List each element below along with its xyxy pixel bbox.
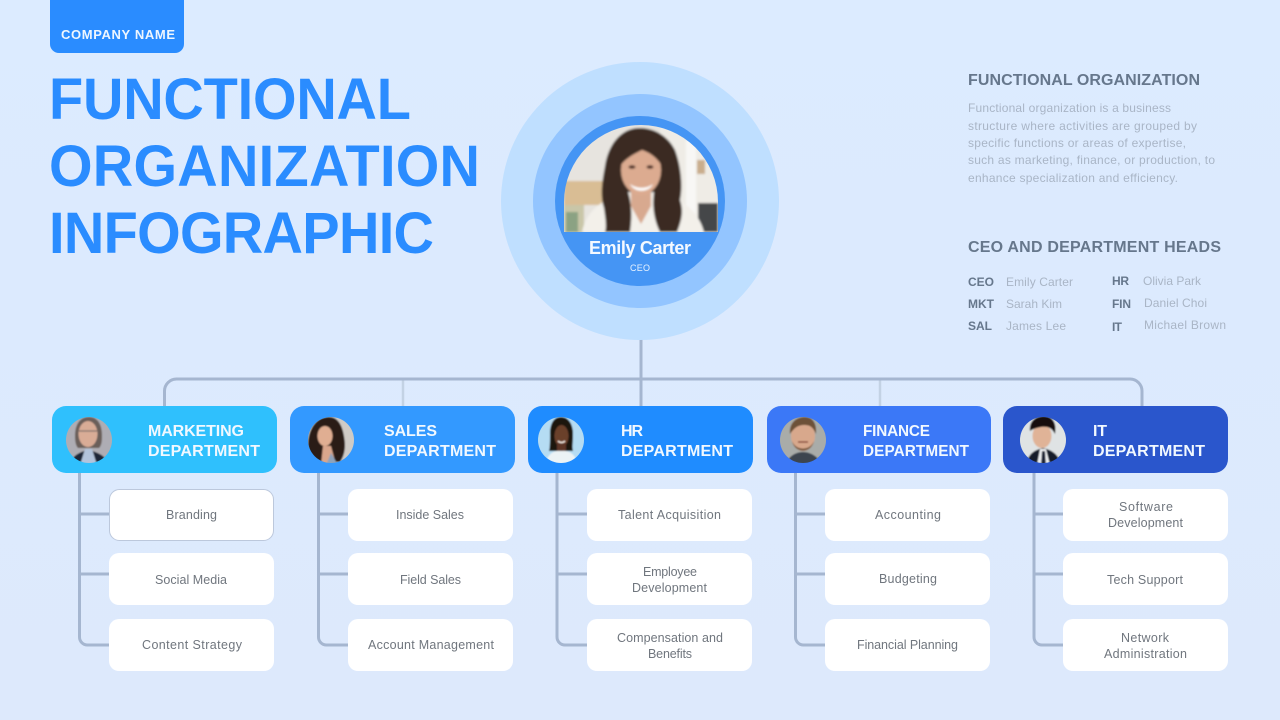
content strategy box: Content Strategy <box>142 638 243 652</box>
tech support box: Tech Support <box>1107 573 1184 587</box>
network administration box: Network <box>1121 631 1170 645</box>
hr header: HR <box>621 423 643 440</box>
content strategy box <box>109 619 274 671</box>
panel: marketing department <box>52 406 277 671</box>
title: ORGANIZATION <box>49 134 480 199</box>
branding box <box>110 490 274 540</box>
description block <box>968 72 1215 185</box>
finance header <box>767 406 991 473</box>
CEO and department heads list: Daniel Choi <box>1144 296 1207 310</box>
sales header: DEPARTMENT <box>384 443 496 460</box>
hr header <box>528 406 753 473</box>
marketing header <box>52 406 277 473</box>
field sales box <box>348 553 513 605</box>
CEO and department heads list: FIN <box>1112 297 1131 311</box>
portrait: it head <box>1020 417 1066 463</box>
financial planning box <box>825 619 990 671</box>
it header: IT <box>1093 423 1107 440</box>
social media box <box>109 553 274 605</box>
talent acquisition box <box>587 489 752 541</box>
description block: FUNCTIONAL ORGANIZATION <box>968 72 1200 89</box>
field sales box: Field Sales <box>400 573 461 587</box>
org chart connector lines <box>164 338 1142 406</box>
company name tab <box>50 0 184 53</box>
sales header <box>290 406 515 473</box>
CEO and department heads list: Michael Brown <box>1144 318 1226 332</box>
sales header: SALES <box>384 423 437 440</box>
CEO role: CEO <box>630 263 650 273</box>
panel: finance department <box>767 406 991 671</box>
CEO and department heads list: CEO AND DEPARTMENT HEADS <box>968 239 1221 256</box>
company name tab: COMPANY NAME <box>61 27 175 42</box>
marketing header: MARKETING <box>148 423 244 440</box>
CEO and department heads list: Sarah Kim <box>1006 297 1062 311</box>
portrait: marketing head <box>66 417 112 463</box>
description block: structure where activities are grouped by <box>968 119 1197 133</box>
hr header: DEPARTMENT <box>621 443 733 460</box>
CEO and department heads list: Emily Carter <box>1006 275 1073 289</box>
panel: it department <box>1003 406 1228 671</box>
CEO and department heads list: CEO <box>968 275 994 289</box>
description block: such as marketing, finance, or production, to <box>968 153 1215 167</box>
account management box: Account Management <box>368 638 495 652</box>
financial planning box: Financial Planning <box>857 638 958 652</box>
CEO circle <box>501 62 779 340</box>
portrait: sales head <box>308 417 354 463</box>
portrait: finance head <box>780 417 826 463</box>
CEO and department heads list <box>968 239 1226 334</box>
accounting box <box>825 489 990 541</box>
employee development box: Development <box>632 581 708 595</box>
CEO and department heads list: SAL <box>968 319 992 333</box>
CEO and department heads list: MKT <box>968 297 995 311</box>
title <box>49 67 480 266</box>
talent acquisition box: Talent Acquisition <box>618 508 721 522</box>
software development box <box>1063 489 1228 541</box>
CEO and department heads list: James Lee <box>1006 319 1066 333</box>
employee development box <box>587 553 752 605</box>
software development box: Software <box>1119 500 1173 514</box>
account management box <box>348 619 513 671</box>
employee development box: Employee <box>643 565 697 579</box>
branding box: Branding <box>166 508 217 522</box>
portrait: hr head <box>538 417 584 463</box>
budgeting box: Budgeting <box>879 572 937 586</box>
compensation and benefits box: Compensation and <box>617 631 723 645</box>
title: INFOGRAPHIC <box>49 201 434 266</box>
finance header: FINANCE <box>863 423 930 440</box>
network administration box <box>1063 619 1228 671</box>
social media box: Social Media <box>155 573 227 587</box>
budgeting box <box>825 553 990 605</box>
CEO and department heads list: IT <box>1112 320 1123 334</box>
description block: Functional organization is a business <box>968 101 1171 115</box>
tech support box <box>1063 553 1228 605</box>
network administration box: Administration <box>1104 647 1187 661</box>
description block: specific functions or areas of expertise, <box>968 136 1186 150</box>
compensation and benefits box <box>587 619 752 671</box>
description block: enhance specialization and efficiency. <box>968 171 1178 185</box>
inside sales box: Inside Sales <box>396 508 464 522</box>
CEO portrait <box>564 125 718 232</box>
it header <box>1003 406 1228 473</box>
CEO and department heads list: HR <box>1112 274 1129 288</box>
marketing header: DEPARTMENT <box>148 443 260 460</box>
software development box: Development <box>1108 516 1184 530</box>
inside sales box <box>348 489 513 541</box>
CEO name: Emily Carter <box>589 238 691 258</box>
compensation and benefits box: Benefits <box>648 647 692 661</box>
title: FUNCTIONAL <box>49 67 411 132</box>
CEO and department heads list: Olivia Park <box>1143 274 1202 288</box>
finance header: DEPARTMENT <box>863 443 970 460</box>
accounting box: Accounting <box>875 508 941 522</box>
it header: DEPARTMENT <box>1093 443 1205 460</box>
panel: sales department <box>290 406 515 671</box>
panel: hr department <box>528 406 753 671</box>
